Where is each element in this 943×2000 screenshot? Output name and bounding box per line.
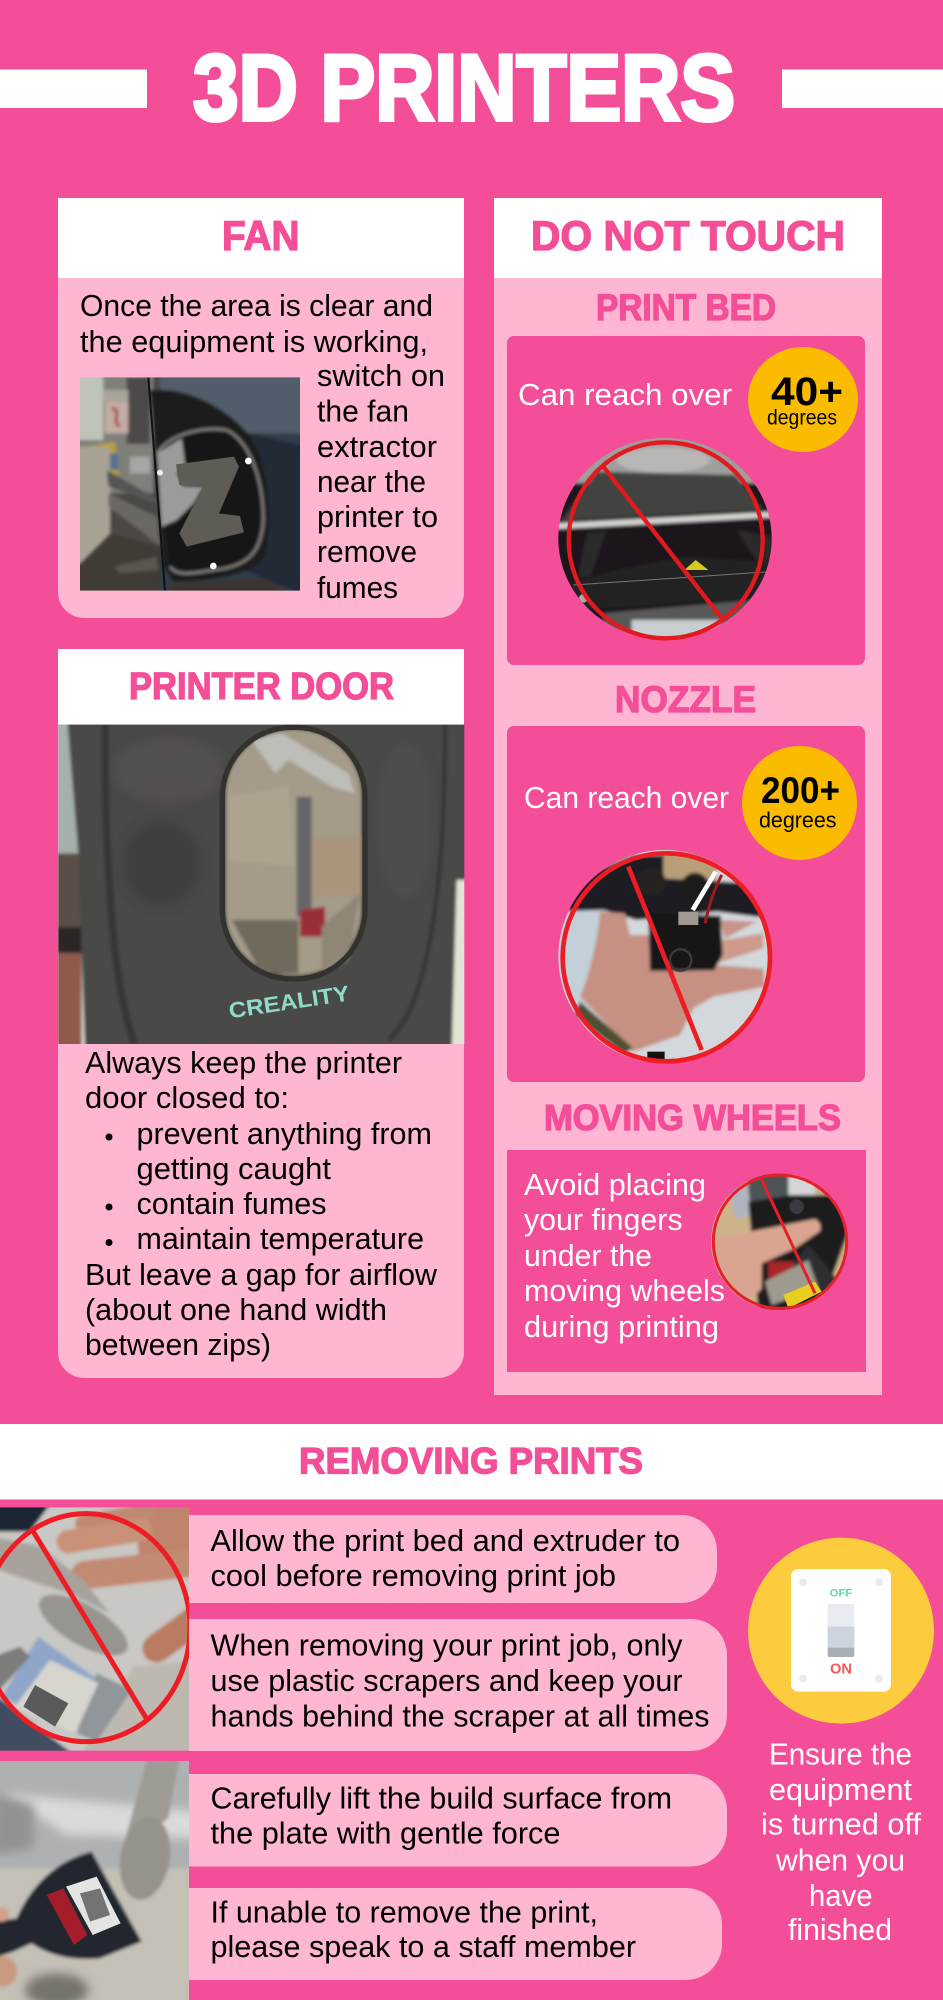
text: moving wheels warning: your fingers (524, 1202, 682, 1237)
text: moving wheels warning: moving wheels (524, 1273, 725, 1308)
heading: printer door: PRINTER DOOR (129, 666, 394, 708)
text: door instructions: But leave a gap for airflow (85, 1257, 438, 1292)
heading: moving wheels: MOVING WHEELS (544, 1097, 841, 1138)
text: print bed warning: Can reach over (518, 377, 732, 412)
icon: light switch: ON (830, 1661, 852, 1677)
pill: speak to staff (189, 1888, 722, 1980)
heading: do not touch: DO NOT TOUCH (531, 212, 845, 259)
photo: print bed with prohibition sign (558, 438, 772, 640)
badge: 40+ degrees: 40+ (771, 370, 843, 414)
title: 3D PRINTERS (193, 35, 735, 140)
panel: do not touch (494, 198, 882, 1395)
text: door instructions: contain fumes (136, 1186, 326, 1221)
icon: light switch (748, 1538, 934, 1724)
title banner (0, 35, 943, 140)
section band: removing prints (0, 1424, 943, 1500)
panel: printer door (48, 649, 475, 1378)
text: brand on door: CREALITY (227, 981, 351, 1023)
pill: cool before removing (189, 1515, 717, 1603)
text: fan instructions (80, 288, 445, 605)
pill: plastic scrapers: use plastic scrapers and keep your (210, 1663, 682, 1698)
badge: 40+ degrees: degrees (767, 406, 837, 430)
pill: cool before removing: cool before removing print job (210, 1558, 616, 1593)
badge: 40+ degrees (748, 347, 858, 452)
text: turn off reminder: is turned off (761, 1806, 921, 1842)
text: turn off reminder: have (809, 1878, 872, 1913)
text: fan instructions: remove (317, 534, 417, 569)
Z logo shape (176, 457, 244, 547)
photo: printer enclosure door (58, 724, 464, 1044)
text: moving wheels warning: during printing (524, 1309, 719, 1344)
text: door instructions: getting caught (136, 1151, 331, 1186)
text: moving wheels warning (524, 1167, 725, 1344)
text: fan instructions: Once the area is clear and (80, 288, 433, 323)
photo: fan extractor with Z logo (80, 377, 300, 591)
panel: fan (58, 198, 464, 618)
text: fan instructions: near the (317, 464, 426, 499)
text: turn off reminder: when you (775, 1842, 905, 1878)
pill: plastic scrapers: hands behind the scraper at all times (210, 1698, 710, 1734)
badge: 200+ degrees: degrees (759, 808, 836, 832)
heading: removing prints: REMOVING PRINTS (299, 1440, 643, 1482)
text: fan instructions: switch on (317, 358, 445, 393)
card: moving wheels (507, 1150, 866, 1372)
photo: finger near wheels with prohibition sign (711, 1173, 848, 1310)
text: moving wheels warning: Avoid placing (524, 1167, 706, 1202)
pill: lift build surface: the plate with gentle force (210, 1816, 560, 1850)
text: fan instructions: the fan (317, 394, 409, 428)
heading: print bed: PRINT BED (596, 287, 776, 328)
pill: lift build surface: Carefully lift the build surface from (210, 1780, 672, 1816)
text: nozzle warning: Can reach over (524, 780, 729, 815)
pill: cool before removing: Allow the print bed and extruder to (210, 1523, 680, 1558)
text: door instructions: (about one hand width (85, 1292, 387, 1327)
card: print bed (507, 336, 865, 665)
badge: 200+ degrees (742, 746, 857, 860)
text: door instructions: between zips) (85, 1327, 271, 1362)
text: turn off reminder: equipment (769, 1772, 912, 1807)
text: moving wheels warning: under the (524, 1238, 652, 1273)
photo: hand removing print with prohibition sign (0, 1507, 189, 1751)
heading: fan: FAN (222, 212, 300, 259)
text: door instructions: door closed to: (85, 1080, 289, 1115)
text: turn off reminder: finished (788, 1912, 892, 1947)
pill: lift build surface (189, 1774, 727, 1866)
text: door instructions (85, 1045, 438, 1362)
text: fan instructions: printer to (317, 499, 438, 534)
text: turn off reminder: Ensure the (769, 1736, 912, 1772)
heading: nozzle: NOZZLE (615, 679, 756, 720)
pill: plastic scrapers: When removing your print job, only (210, 1628, 683, 1662)
card: nozzle (507, 726, 865, 1082)
text: turn off reminder (761, 1736, 921, 1947)
text: fan instructions: fumes (317, 570, 398, 605)
text: door instructions: prevent anything from (136, 1116, 432, 1151)
pill: speak to staff: please speak to a staff member (210, 1929, 636, 1964)
photo: plastic scraper and prints (0, 1755, 200, 2000)
pill: plastic scrapers (189, 1619, 727, 1751)
text: door instructions: Always keep the printer (85, 1045, 402, 1080)
icon: light switch: OFF (830, 1588, 852, 1600)
badge: 200+ degrees: 200+ (761, 770, 840, 811)
pill: speak to staff: If unable to remove the print, (210, 1894, 598, 1930)
text: fan instructions: extractor (317, 429, 437, 464)
photo: hand under nozzle with prohibition sign (558, 850, 772, 1064)
text: fan instructions: the equipment is working, (80, 324, 428, 359)
text: door instructions: maintain temperature (136, 1221, 424, 1256)
